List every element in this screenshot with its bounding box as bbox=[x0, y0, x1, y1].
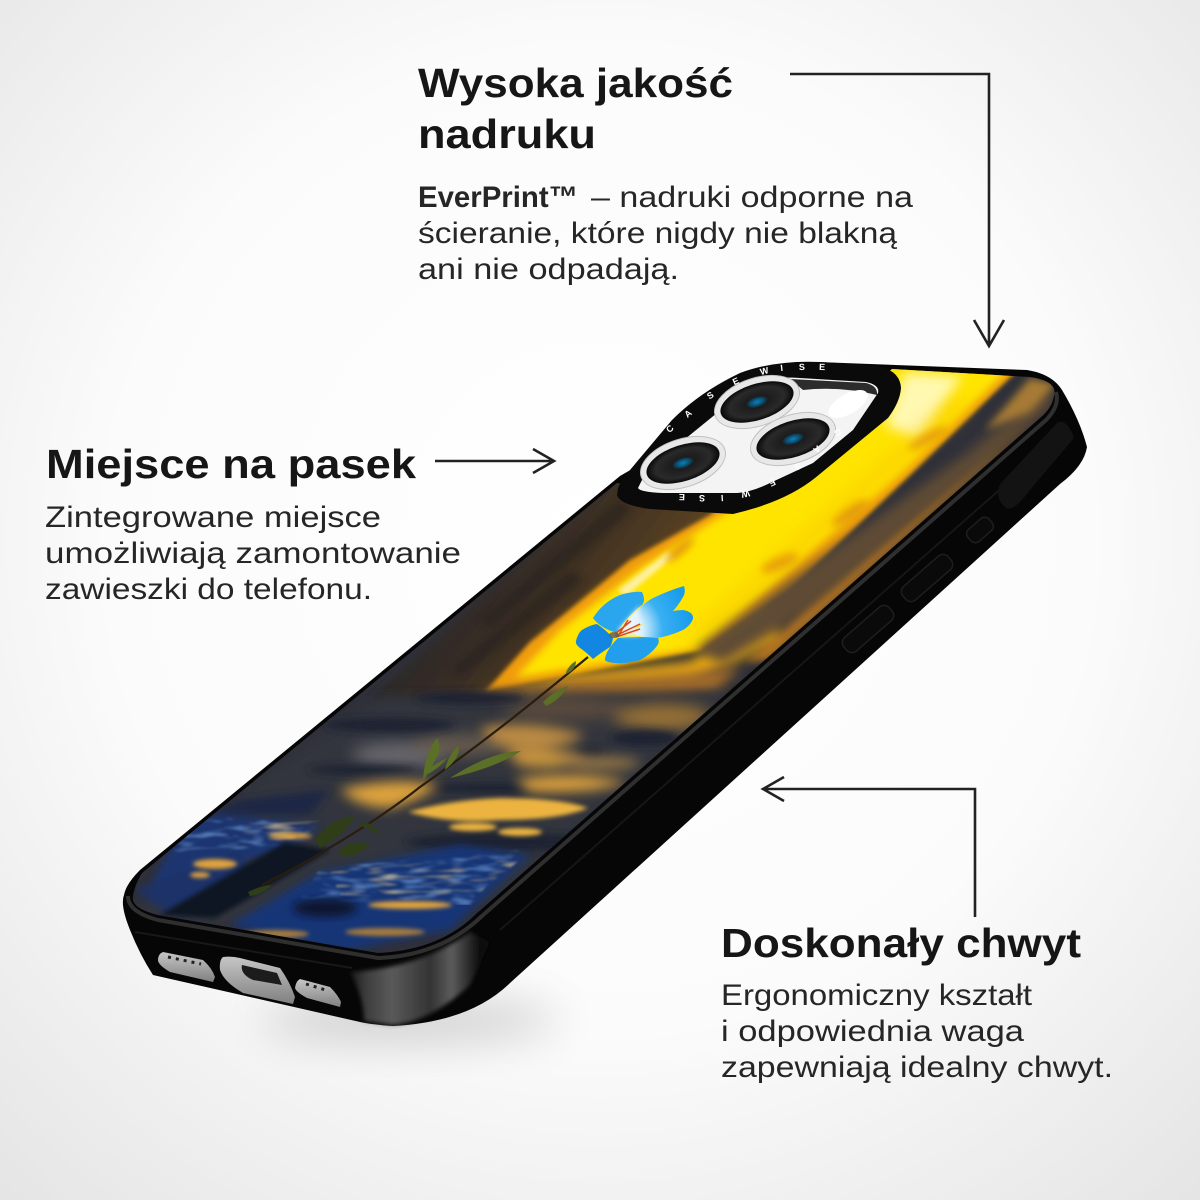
bottom ports bbox=[158, 952, 341, 1007]
case body bbox=[123, 362, 1087, 1026]
camera window bbox=[638, 378, 878, 493]
dark pit bbox=[293, 899, 357, 917]
body text bbox=[721, 979, 1113, 1084]
dark bands bbox=[308, 692, 679, 851]
rock ripple: blue bbox=[170, 814, 520, 905]
bumper lettering: top: S bbox=[705, 390, 716, 401]
petal: bottom bbox=[605, 637, 659, 663]
rim outer ridge bbox=[500, 440, 1056, 930]
camera module bbox=[617, 362, 901, 514]
lens: right bbox=[744, 403, 842, 475]
bumper lettering: bottom bbox=[679, 426, 844, 503]
flower bbox=[576, 586, 693, 663]
petal: left bbox=[576, 624, 613, 659]
body text: ani nie odpadają. bbox=[418, 253, 679, 286]
speaker left bbox=[158, 952, 215, 982]
callout: grip bbox=[721, 920, 1113, 1084]
bumper lettering: top: W bbox=[759, 365, 770, 377]
phone shadow bbox=[260, 998, 560, 1042]
bumper lettering: bottom: C bbox=[832, 426, 844, 439]
bumper lettering: bottom: S bbox=[699, 493, 705, 503]
pale highlight bbox=[885, 372, 962, 440]
lens: left bbox=[634, 427, 732, 499]
side switch bbox=[964, 515, 996, 545]
charging port bbox=[220, 957, 295, 1004]
phone case bbox=[123, 362, 1087, 1026]
bumper lettering: top: C bbox=[664, 423, 676, 435]
upper brown area bbox=[376, 483, 714, 698]
yellow band bbox=[515, 365, 1010, 678]
corner bumper highlight bbox=[350, 932, 490, 1025]
bumper lettering: bottom: E bbox=[767, 477, 777, 489]
bumper lettering: top: S bbox=[799, 362, 805, 372]
petal: top right bbox=[627, 586, 685, 628]
horizon orange bbox=[470, 668, 740, 702]
bumper lettering: top: E bbox=[731, 375, 741, 387]
body text bbox=[418, 181, 913, 286]
bumper lettering: bottom: W bbox=[740, 488, 751, 500]
heading: Wysoka jakość bbox=[418, 60, 733, 106]
arrow: to print surface bbox=[790, 74, 1004, 346]
amber fringe of yellow band bbox=[485, 365, 1020, 692]
case rim highlight bbox=[128, 392, 1057, 958]
body text bbox=[45, 501, 461, 606]
bumper lettering: top bbox=[664, 362, 825, 435]
heading: nadruku bbox=[418, 111, 596, 157]
lower reflections bbox=[190, 833, 452, 938]
bumper lettering: top: E bbox=[819, 362, 825, 372]
body text: EverPrint™ bbox=[418, 181, 578, 214]
brown streaks bbox=[450, 500, 632, 676]
rock ripple: gold bbox=[230, 820, 530, 900]
white throat bbox=[618, 605, 640, 636]
mid amber band bbox=[702, 396, 960, 630]
strap slot bbox=[998, 422, 1074, 509]
upper leaves bbox=[423, 661, 576, 781]
heading bbox=[418, 60, 733, 157]
blue rocks bbox=[135, 790, 530, 952]
bumper lettering: top: A bbox=[682, 407, 694, 420]
right brown strip bbox=[695, 385, 1052, 664]
body text: umożliwiają zamontowanie bbox=[45, 537, 461, 570]
golden reflections bbox=[340, 724, 640, 808]
dark trunk bbox=[160, 842, 330, 918]
warm edge near rim bbox=[745, 442, 1010, 666]
petal: right bbox=[635, 610, 693, 638]
blurred amber marks bbox=[664, 423, 950, 577]
lower dark ground bbox=[120, 692, 730, 930]
lens: top bbox=[708, 366, 806, 438]
arrow: to side grip bbox=[763, 777, 975, 917]
plant stem and leaves bbox=[248, 657, 588, 896]
warm haze bbox=[352, 696, 711, 768]
side button: lower volume bbox=[839, 603, 897, 655]
window soft shade bbox=[824, 384, 872, 424]
body text: – nadruki odporne na bbox=[591, 181, 913, 214]
lower amber glow bbox=[512, 623, 784, 692]
body text: Ergonomiczny kształt bbox=[721, 979, 1033, 1012]
lower leaves bbox=[248, 816, 380, 896]
bumper lettering: bottom: I bbox=[721, 493, 724, 503]
printed artwork bbox=[120, 360, 1070, 960]
heading: Doskonały chwyt bbox=[721, 920, 1081, 966]
heading: Miejsce na pasek bbox=[46, 441, 416, 487]
bumper lettering: bottom: S bbox=[792, 461, 803, 472]
camera bumper bbox=[617, 362, 901, 514]
pistil shade bbox=[609, 632, 619, 638]
speaker right bbox=[295, 979, 341, 1007]
stem bbox=[262, 657, 588, 885]
callout: print quality bbox=[418, 60, 913, 286]
window inner shade bbox=[790, 379, 877, 395]
body text: ścieranie, które nigdy nie blakną bbox=[418, 217, 897, 250]
body text: Zintegrowane miejsce bbox=[45, 501, 381, 534]
artwork base bbox=[120, 360, 1070, 960]
bottom edge line bbox=[135, 932, 352, 968]
side button: upper volume bbox=[898, 552, 956, 604]
flower centre bbox=[615, 620, 640, 637]
body text: i odpowiednia waga bbox=[721, 1015, 1024, 1048]
bumper lettering: top: I bbox=[780, 363, 783, 373]
body text: zawieszki do telefonu. bbox=[45, 573, 372, 606]
petal: upper left bbox=[593, 592, 644, 633]
bumper lettering: bottom: E bbox=[679, 492, 685, 502]
arrow: to strap mount bbox=[435, 449, 554, 473]
body text: zapewniają idealny chwyt. bbox=[721, 1051, 1113, 1084]
bumper lettering: bottom: A bbox=[811, 443, 823, 456]
callout: strap mount bbox=[45, 441, 461, 606]
